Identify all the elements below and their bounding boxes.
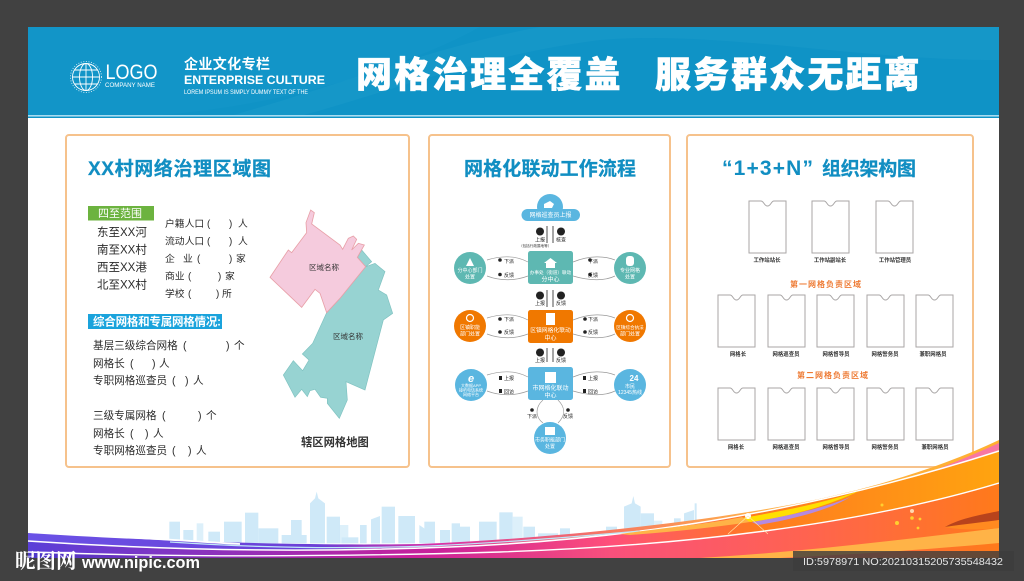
row: second grid members: 网格巡查员 [773,443,800,451]
arrows and labels: to city departments [527,400,573,423]
node: online platform [455,369,487,401]
text: statistics list: ) [229,254,232,265]
connector: row one to two: 上报 [535,300,545,307]
logo [70,61,158,92]
watermark: image id: ID:5978971 NO:20210315205735548432 [803,556,1003,568]
text: grid details: 网格长 [93,428,125,440]
arrows and labels: row two: 下派 [504,317,514,323]
text: statistics list: ( [207,236,211,248]
text: grid details: ) [145,428,149,440]
enterprise culture text: LOREM IPSUM IS SIMPLY DUMMY TEXT OF THE [184,90,308,96]
node: hotline: 24 [630,374,639,383]
node: district enforcement: 部门处置 [620,330,640,338]
node: online platform: 网络平台 [463,391,479,397]
text: statistics list: 流动人口 [165,236,204,248]
arrows and labels: row three: 上报 [504,375,514,382]
arrows and labels: row one: 反馈 [504,272,514,279]
text: statistics list: ) [229,219,232,230]
node: professional grid [614,252,646,284]
text: statistics list: 商业 [165,272,185,282]
heading: organization [722,157,916,180]
map caption: 辖区网格地图 [301,435,369,449]
map: pink region [270,210,366,313]
text: statistics list: ( [197,254,201,265]
node: district department [454,310,486,342]
icon: globe [70,62,102,92]
text: grid details: ) [152,358,156,370]
node: city center [528,367,573,400]
arrows and labels: row one: 反馈 [588,272,598,279]
arrows and labels: row one: 下派 [504,259,514,265]
heading: map panel: XX村网络治理区域图 [88,157,271,180]
text: statistics list: ) [218,272,221,282]
heading: organization: “1+3+N” [722,157,813,180]
arrows and labels: row one [487,257,615,280]
node: professional grid: 专业网格 [620,267,640,274]
text: statistics list: 家 [225,270,235,282]
row: first grid members: 兼职网格员 [920,350,947,358]
connector: row two to three: 反馈 [556,357,566,364]
panel: village grid map [66,135,409,467]
map: teal region [283,250,393,418]
arrows and labels: to city departments: 反馈 [563,413,573,420]
row: first grid members: 网格警务员 [872,350,899,358]
city skyline [169,492,697,543]
text: statistics list: 业 [183,253,193,265]
text: boundary list: 东至XX河 [97,226,147,239]
node: professional grid: 处置 [625,274,635,280]
text: grid details: 三级专属网格 [93,410,157,422]
rainbow swoosh [28,440,999,558]
node: city departments: 处置 [545,443,555,450]
node: district center: 区镇网格化联动 [530,326,571,334]
node: online platform: 大数据APP [461,382,481,388]
node: sub center department [454,252,486,284]
text: statistics list: 企 [165,254,175,265]
node: sub center [528,251,573,284]
arrows and labels: row one: 下派 [588,259,598,265]
node: district enforcement: 区镇综合执法 [616,324,644,331]
text: grid details: 基层三级综合网格 [93,340,178,352]
row: first grid members [718,295,953,358]
map label: teal region: 区域名称 [333,331,363,341]
row: station leaders [749,201,913,264]
text: statistics list: 人 [238,218,248,230]
row: first grid members: 网格巡查员 [773,350,800,358]
watermark: nipic: 昵图网 [15,544,76,574]
text: boundary list: 南至XX村 [97,242,147,256]
node: online platform: e [468,373,474,385]
arrows and labels: row two: 反馈 [504,329,514,336]
text: statistics list: ) [229,236,232,248]
node: hotline: 12345热线 [618,389,642,396]
text: grid details: 人 [159,358,170,370]
connector: row one to two [535,290,566,307]
node: district center: 中心 [544,334,557,342]
node: sub center department: 处置 [465,274,475,280]
node: inspector report: 网格巡查员上报 [529,211,572,219]
text: statistics list: 家 [236,252,246,265]
text: statistics list: 所 [222,288,232,300]
row: first grid members: 网格长 [730,350,747,358]
connector: row one to two: 反馈 [556,300,566,307]
row: station leaders: 工作站管理员 [879,256,912,264]
node: sub center department: 分中心部门 [457,267,483,274]
arrows and labels: row three: 上报 [588,375,598,382]
title: 网格治理全覆盖 [356,54,623,95]
text: grid details: ) [185,375,189,387]
node: district department: 部门处置 [460,330,480,338]
text: grid details: 专职网格巡查员 [93,375,167,387]
connector: report and verify: （包括行政属地等） [519,243,551,248]
node: sub center: 分中心 [541,276,560,284]
text: grid details: 人 [153,428,164,440]
row: station leaders: 工作站站长 [754,256,781,264]
label: four boundaries [88,206,154,220]
node: hotline: 市民 [625,383,635,390]
text: grid details: ( [130,428,134,440]
arrows and labels: row three: 回访 [504,388,514,396]
row: first grid members: 网格督导员 [823,350,850,358]
text: grid details: 人 [193,375,204,387]
text: statistics list: 户籍人口 [165,219,204,230]
arrows and labels: row two: 反馈 [588,329,598,336]
text: statistics list: ) [216,289,219,300]
sparkle [728,504,921,534]
logo: LOGO [106,61,158,84]
text: grid details: 个 [206,410,217,422]
arrows and labels: row two [487,315,615,338]
node: city departments: 市务职能部门 [535,436,565,444]
text: grid details: ( [162,410,166,422]
watermark: image id [793,551,1014,571]
text: grid details: 专职网格巡查员 [93,445,167,457]
row: station leaders: 工作站副站长 [814,256,847,264]
title [356,54,922,95]
title: 服务群众无距离 [655,54,922,95]
text: statistics list: ( [188,289,192,300]
text: grid details: 网格长 [93,358,125,370]
enterprise culture text: 企业文化专栏 [184,56,270,72]
text: grid details: ( [130,358,134,370]
map label: pink region: 区域名称 [309,262,339,272]
text: grid details: ( [172,375,176,387]
text: boundary list: 西至XX港 [97,261,147,274]
row: second grid members: 兼职网格员 [922,443,949,451]
text: grid details: 人 [196,445,207,457]
row: second grid members: 网格长 [728,443,745,451]
text: grid details: ) [188,445,192,457]
enterprise culture text [184,56,325,96]
node: online platform: 接听电话系统 [459,386,483,392]
node: city departments [534,422,566,454]
node: sub center: 办事处（街道）联动 [530,269,572,276]
header banner [28,27,999,118]
text: grid details: ( [183,340,187,352]
row: second grid members: 网格督导员 [823,443,850,451]
text: grid details: ( [172,445,176,457]
panel: workflow [429,135,670,467]
node: city center: 中心 [544,392,557,400]
watermark: nipic [15,544,200,574]
connector: row two to three: 上报 [535,357,545,364]
enterprise culture text: ENTERPRISE CULTURE [184,75,325,87]
text: boundary list: 北至XX村 [97,278,147,292]
text: statistics list: 学校 [165,289,185,300]
connector: row two to three [535,348,566,364]
arrows and labels: row three: 回访 [588,388,598,396]
connector: report and verify: 核查 [556,236,566,244]
text: grid details: ) [226,340,230,352]
heading: organization: 组织架构图 [822,158,916,180]
connector: report and verify: 上报 [535,236,545,244]
panel: organization [687,135,973,467]
subheading: second grid area: 第二网格负责区域 [797,370,869,380]
heading: workflow: 网格化联动工作流程 [464,158,636,180]
label: four boundaries: 四至范围 [98,206,142,220]
text: statistics list: ( [188,272,192,282]
label: grid situation: 综合网格和专属网格情况: [93,314,221,328]
row: second grid members: 网格警务员 [872,443,899,451]
node: hotline [614,369,646,401]
logo: COMPANY NAME [105,82,155,89]
text: boundary list [97,226,147,292]
arrows and labels: row two: 下派 [588,317,598,323]
subheading: first grid area: 第一网格负责区域 [790,279,862,289]
arrows and labels: row three [487,372,615,396]
text: statistics list [165,217,248,300]
arrows and labels: to city departments: 下派 [527,414,537,420]
node: district department: 区镇职能 [460,324,480,331]
row: second grid members [718,388,953,451]
node: district center [528,310,573,343]
text: grid details: 个 [234,340,245,352]
connector: report and verify [519,226,566,248]
node: district enforcement [614,310,646,342]
text: statistics list: ( [207,219,211,230]
node: inspector report [522,194,580,221]
text: statistics list: 人 [238,236,248,248]
text: grid details [93,339,245,457]
watermark: nipic: www.nipic.com [81,554,200,572]
node: city center: 市网格化联动 [532,384,569,392]
text: grid details: ) [198,410,202,422]
